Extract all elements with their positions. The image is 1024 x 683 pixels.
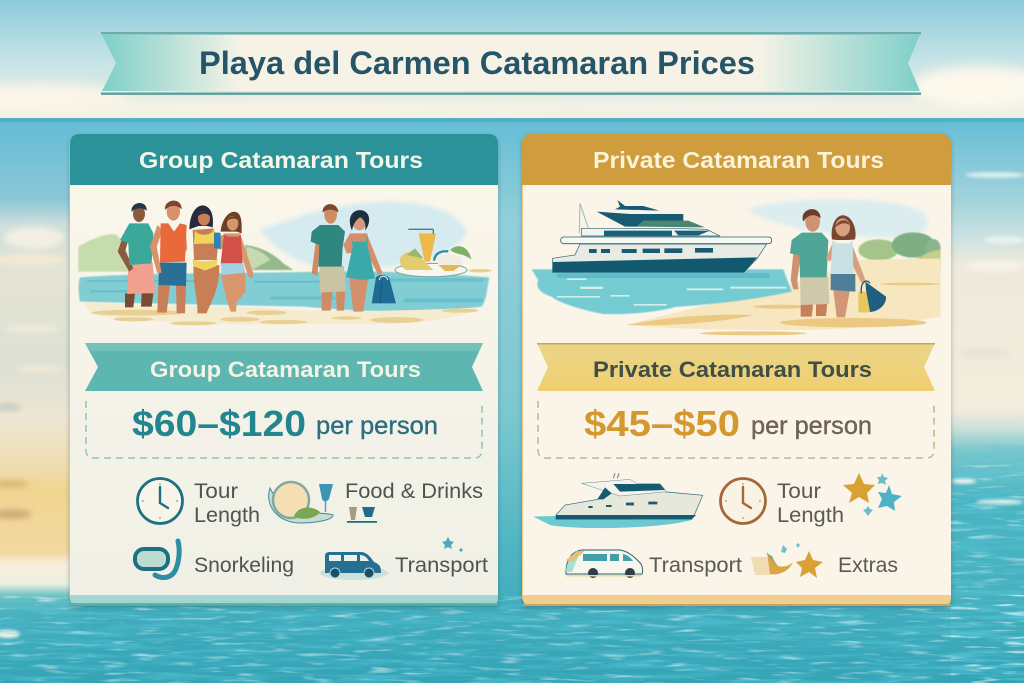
feature: transport: Transport bbox=[649, 554, 742, 577]
sub-heading ribbon: Group Catamaran Tours bbox=[150, 357, 421, 382]
feature: transport: Transport bbox=[395, 554, 488, 577]
food platter bbox=[395, 229, 471, 277]
right side clouds bbox=[945, 122, 1024, 683]
feature: tour length: Length bbox=[777, 504, 844, 527]
shrubs bbox=[858, 232, 941, 269]
feature: food and drinks: Food & Drinks bbox=[345, 480, 483, 503]
feature: extras bbox=[751, 543, 898, 578]
icon: clock bbox=[720, 478, 766, 524]
heading: Group Catamaran Tours bbox=[139, 147, 423, 173]
icon: snorkel mask bbox=[135, 541, 179, 578]
beach bag bbox=[858, 281, 886, 312]
icon: stars bbox=[843, 473, 902, 516]
per person: per person bbox=[316, 412, 438, 440]
person 3 bbox=[189, 205, 219, 313]
feature: tour length: Length bbox=[194, 504, 260, 527]
sub-heading ribbon bbox=[85, 343, 483, 391]
heading: Private Catamaran Tours bbox=[593, 147, 884, 173]
feature: tour length: Tour bbox=[777, 480, 821, 503]
sky patch bbox=[260, 202, 467, 270]
sand bbox=[83, 269, 492, 325]
illustration: group on beach bbox=[78, 201, 492, 325]
price: $60–$120 bbox=[132, 403, 306, 444]
feature: transport bbox=[566, 550, 742, 578]
feature: tour length: Tour bbox=[194, 480, 238, 503]
man bbox=[790, 209, 829, 317]
title: Playa del Carmen Catamaran Prices bbox=[199, 45, 755, 81]
panel body bbox=[70, 134, 498, 606]
sand bbox=[627, 258, 941, 330]
yacht bbox=[553, 200, 772, 272]
title banner bbox=[101, 32, 921, 95]
panel: group catamaran tours bbox=[70, 134, 498, 606]
icon: van bbox=[566, 550, 643, 578]
price box bbox=[538, 401, 934, 458]
person 2 bbox=[150, 201, 187, 313]
person 1 bbox=[118, 203, 155, 307]
illustration: yacht and couple bbox=[532, 199, 941, 335]
person 6 bbox=[343, 210, 383, 312]
per person: per person bbox=[751, 412, 872, 440]
icon: clock bbox=[138, 478, 182, 524]
woman bbox=[826, 215, 866, 317]
feature: transport bbox=[320, 537, 488, 580]
feature: snorkeling bbox=[135, 541, 294, 578]
water bbox=[532, 269, 792, 314]
feature: snorkeling: Snorkeling bbox=[194, 554, 294, 577]
sub-heading ribbon: Private Catamaran Tours bbox=[593, 357, 872, 382]
panel body bbox=[522, 134, 951, 606]
icon: small yacht bbox=[533, 473, 703, 528]
feature: boat bbox=[533, 473, 703, 528]
feature: food and drinks bbox=[269, 480, 483, 523]
background: sky bbox=[0, 0, 1024, 120]
horizon line bbox=[0, 118, 1024, 122]
person 5 bbox=[311, 204, 346, 311]
price box bbox=[86, 401, 482, 458]
feature: extras: Extras bbox=[838, 554, 898, 577]
icon: small stars bbox=[442, 537, 463, 552]
beach bag bbox=[372, 275, 396, 303]
sky patch bbox=[747, 199, 928, 237]
person 4 bbox=[214, 212, 253, 312]
icon: van bbox=[320, 552, 388, 580]
feature: tour length bbox=[720, 473, 902, 527]
sub-heading ribbon bbox=[537, 343, 935, 391]
sand streaks bbox=[627, 283, 940, 335]
icon: extras with star bbox=[751, 543, 823, 578]
panel: private catamaran tours bbox=[522, 134, 951, 606]
icon: plate and glasses bbox=[269, 482, 377, 523]
feature: tour length bbox=[138, 478, 260, 527]
water bbox=[78, 271, 489, 312]
left side clouds and sand bbox=[0, 122, 78, 683]
price: $45–$50 bbox=[584, 403, 740, 444]
islands bbox=[78, 234, 293, 272]
